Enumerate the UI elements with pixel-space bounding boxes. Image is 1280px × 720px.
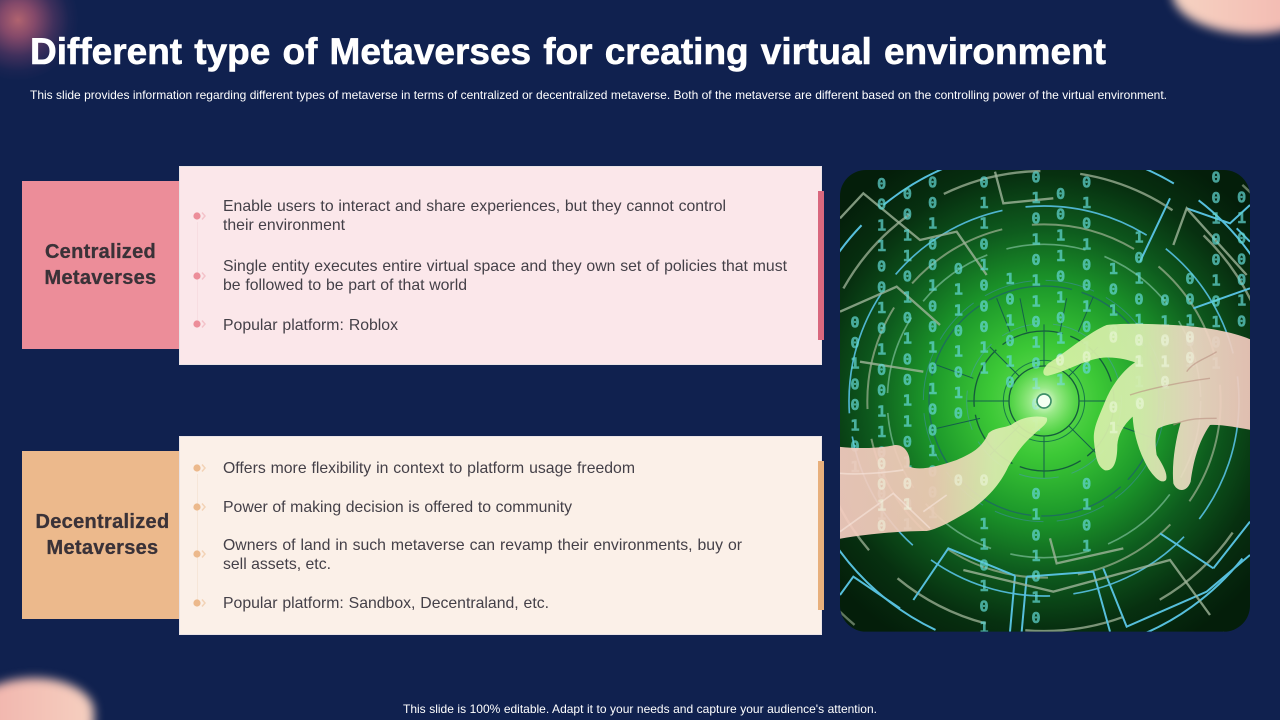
centralized label [22, 181, 179, 349]
touch point [1037, 394, 1051, 408]
binary digits over hands: 00 [1181, 328, 1199, 370]
bullet text 2: Power of making decision is offered to community [223, 499, 572, 516]
footer note: This slide is 100% editable. Adapt it to your needs and capture your audience's attention. [403, 702, 877, 716]
binary columns: 00110010100110001 [873, 175, 891, 526]
decentralized accent bar [818, 461, 824, 610]
bullet text 4: Popular platform: Sandbox, Decentraland, etc. [223, 595, 549, 612]
centralized label: Centralized [45, 241, 156, 263]
bullet text 1: Enable users to interact and share experiences, but they cannot control [223, 198, 726, 215]
bullet icon 4 [193, 599, 206, 607]
centralized content card [179, 166, 822, 365]
subtitle: This slide provides information regarding different types of metaverse in terms of centralized or decentralized metaverse. Both of the metaverse are different based on the controlling power of the virtual environment. [30, 88, 1167, 102]
bullet text 3: Owners of land in such metaverse can revamp their environments, buy or [223, 537, 742, 554]
green radial background [840, 165, 1260, 635]
decorative blob: top right [1172, 0, 1280, 34]
bullet icon 3 [193, 550, 206, 558]
binary columns: 00100101 [846, 313, 864, 479]
binary digits over hands: 01 [1104, 398, 1122, 440]
decorative glow: top left [0, 0, 78, 80]
decentralized label background [22, 451, 179, 619]
binary columns [846, 168, 1251, 660]
panel: centralized metaverses [22, 166, 824, 365]
binary digits over hands: 01 [1130, 332, 1148, 373]
bullet icon 3 [193, 320, 206, 328]
binary digits over hands: 0 [1131, 395, 1149, 416]
binary digits over hands: 0 [1078, 348, 1096, 369]
binary columns: 1010 [1104, 260, 1122, 343]
decentralized content card [179, 436, 822, 635]
central glow [1014, 371, 1074, 430]
bullet icon 2 [193, 272, 206, 280]
bullet text 1 [223, 198, 726, 234]
binary columns: 0101001010 [1078, 173, 1096, 380]
bullet text 1: Offers more flexibility in context to platform usage freedom [223, 460, 635, 477]
binary columns: 00100100101001001 [924, 173, 942, 525]
bullet text 2: be followed to be part of that world [223, 277, 467, 294]
left hand [838, 416, 1047, 539]
binary columns: 00110101001101001 [898, 185, 916, 536]
centralized accent bar [818, 191, 824, 340]
bullet icon 2 [193, 503, 206, 511]
binary columns: 101010 [1001, 270, 1019, 394]
binary digits over hands: 0 [975, 472, 993, 492]
binary columns: 0101011010101 [1027, 168, 1045, 437]
decentralized label: Metaverses [47, 537, 158, 559]
bullet icon 1 [193, 212, 206, 220]
decentralized label [36, 511, 169, 559]
binary digits over hands [873, 328, 1199, 538]
bullet text 3: Popular platform: Roblox [223, 317, 398, 334]
centralized label: Metaverses [45, 267, 156, 289]
binary columns: 0010010101 [1207, 168, 1225, 375]
bullet text 2 [223, 258, 787, 294]
binary columns: 0110100011 [975, 173, 993, 380]
binary columns: 0100010 [1233, 188, 1251, 333]
panel: decentralized metaverses [22, 436, 824, 635]
bullet text 1: their environment [223, 217, 345, 234]
binary columns: 01011 [1156, 292, 1174, 395]
bullet icon 1 [193, 464, 206, 472]
binary digits over hands: 0 [1051, 352, 1069, 372]
binary columns: 0011010101 [1052, 185, 1070, 392]
decentralized label: Decentralized [36, 511, 169, 533]
binary columns: 101011010 [1130, 228, 1148, 414]
decorative blob: bottom left [0, 678, 94, 720]
circuit rings [840, 170, 1250, 632]
binary digits over hands: 0 [1104, 328, 1122, 349]
bullet text 2: Single entity executes entire virtual space and they own set of policies that must [223, 258, 787, 275]
binary digits over hands: 0 [949, 472, 967, 492]
right hand [1043, 324, 1252, 490]
binary digits over hands: 010 [1156, 332, 1174, 394]
binary columns: 0101 [1078, 475, 1096, 558]
title: Different type of Metaverses for creating virtual environment [30, 31, 1106, 72]
binary digits over hands: 0010 [873, 455, 891, 538]
bullet text 3 [223, 537, 742, 573]
binary digits over hands: 01 [898, 475, 916, 516]
bullet text 3: sell assets, etc. [223, 556, 331, 573]
image: hands touching in digital space [840, 170, 1250, 632]
binary columns: 01101010 [949, 260, 967, 425]
binary columns: 00101 [1181, 270, 1199, 373]
